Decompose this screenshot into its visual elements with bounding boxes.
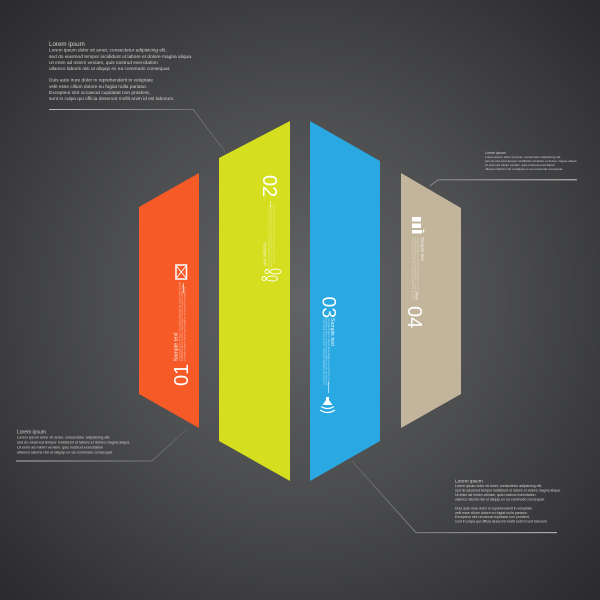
heading: sample text 03: Sample text (329, 318, 335, 346)
text block: bottom right description: Duis aute irure dolor in reprehenderit in voluptate (455, 506, 532, 510)
divider 04 (416, 292, 418, 300)
body lines 03: exercitation ullamco laboris nisi ut aliquip ex ea commodo conseq (327, 318, 330, 385)
text block: top left description: Lorem ipsum dolor sit amet, consectetur adipisicing elit, (49, 48, 167, 54)
leader line: top left (49, 109, 226, 153)
text block: top right description: Lorem ipsum (485, 151, 506, 155)
text block: top left description: ullamco laboris nisi ut aliquip ex ea commodo consequat. (49, 66, 170, 72)
text block: top left description: Duis aute irure dolor in reprehenderit in voluptate (49, 78, 153, 84)
divider 01 (182, 283, 185, 293)
leader line: bottom left (16, 429, 187, 461)
body lines 03 (322, 318, 330, 386)
panel: 02 lime (219, 121, 290, 481)
text block: bottom right description: velit esse cillum dolore eu fugiat nulla pariatur. (455, 511, 528, 515)
text block: top left description: Lorem ipsum (49, 41, 85, 48)
body lines 03: incididunt ut labore et dolore magna aliqua. Ut enim ad minim veni (324, 318, 328, 386)
text block: bottom left description: Lorem ipsum (17, 430, 46, 436)
text block: bottom right description: ullamco laboris nisi ut aliquip ex ea commodo consequat. (455, 497, 545, 501)
number 04: 04 (403, 306, 425, 328)
text block: top left description: velit esse cillum dolore eu fugiat nulla pariatur. (49, 84, 147, 90)
body lines 01 (178, 281, 186, 361)
divider 03 (327, 382, 330, 393)
icon: envelope (176, 265, 186, 279)
heading: sample text 02: Sample text (262, 242, 268, 267)
text block: bottom right description: sed do eiusmod tempor incididunt ut labore et dolore magna aliqua. (455, 488, 561, 492)
body lines 01: exercitation ullamco laboris nisi ut aliquip ex ea commodo consequat sed. (184, 286, 186, 361)
text block: top left description: sunt in culpa qui officia deserunt mollit anim id est laborum. (49, 96, 174, 102)
body lines 01: incididunt ut labore et dolore magna aliqua. Ut enim ad minim veniam, quis (181, 284, 184, 361)
icon: people (262, 269, 281, 281)
divider 02 (269, 201, 272, 207)
text block: bottom right description: Lorem ipsum dolor sit amet, consectetur adipisicing elit, (455, 484, 542, 488)
text block: bottom left description: Ut enim ad minim veniam, quis nostrud exercitation (17, 446, 103, 450)
body lines 04: incididunt ut labore et dolore magna aliqua. Ut enim ad minim (414, 237, 416, 300)
text block: top right description (485, 151, 577, 171)
text block: top left description: Excepteur sint occaecat cupidatat non proident, (49, 90, 150, 96)
panel: 01 orange (139, 173, 199, 428)
number 01: 01 (171, 364, 193, 386)
text block: top right description: Ut enim ad minim veniam, quis nostrud exercitation (485, 163, 555, 167)
text block: top right description: sed do eiusmod tempor incididunt ut labore et dolore magna aliqua. (485, 159, 577, 163)
body lines 02: incididunt ut labore et dolore magna aliqua. Ut enim ad minim (270, 205, 272, 268)
text block: bottom left description: sed do eiusmod tempor incididunt ut labore et dolore magna aliqua. (17, 440, 130, 444)
text block: top left description: sed do eiusmod tempor incididunt ut labore et dolore magna aliqua. (49, 54, 192, 60)
text block: bottom right description (455, 478, 561, 524)
number 03: 03 (318, 296, 340, 318)
heading: sample text 01: Sample text (174, 332, 180, 362)
text block: bottom left description: Lorem ipsum dolor sit amet, consectetur adipisicing elit, (17, 436, 110, 440)
text block: bottom left description: ullamco laboris nisi ut aliquip ex ea commodo consequat. (17, 450, 113, 454)
text block: bottom left description (17, 430, 130, 454)
body lines 02 (267, 205, 275, 270)
leader line: top right (430, 180, 577, 186)
body lines 02: exercitation ullamco laboris nisi ut aliquip ex ea commodo. (272, 205, 275, 265)
body lines 02: Lorem ipsum dolor sit amet, consectetur adipisicing elit, sed do (267, 205, 270, 270)
body lines 04 (411, 237, 419, 302)
text block: bottom right description: Ut enim ad minim veniam, quis nostrud exercitation (455, 493, 535, 497)
body lines 04: Lorem ipsum dolor sit amet, consectetur adipisicing elit, sed do (411, 237, 414, 302)
text block: bottom right description: Lorem ipsum (455, 478, 483, 484)
panel: 04 tan (401, 173, 461, 428)
icon: bars (412, 217, 424, 234)
text block: bottom right description: Excepteur sint occaecat cupidatat non proident, (455, 515, 530, 519)
leader line: bottom right (352, 461, 557, 533)
number 02: 02 (258, 175, 280, 197)
panel: 03 blue (310, 121, 380, 481)
heading: sample text 04: Sample text (420, 237, 425, 262)
text block: top left description (49, 41, 192, 102)
text block: top right description: Lorem ipsum dolor sit amet, consectetur adipisicing elit, (485, 155, 561, 159)
body lines 01: Lorem ipsum dolor sit amet, consectetur adipisicing elit, sed do eiusmod temp (178, 281, 182, 361)
text block: top right description: ullamco laboris nisi ut aliquip ex ea commodo consequat. (485, 167, 563, 171)
icon: speaker (320, 397, 335, 412)
text block: top left description: Ut enim ad minim veniam, quis nostrud exercitation (49, 60, 158, 66)
body lines 03: Lorem ipsum dolor sit amet, consectetur adipisicing elit, sed do ei (322, 318, 325, 385)
body lines 04: exercitation ullamco laboris nisi ut aliquip ex ea commodo. (416, 237, 419, 297)
text block: bottom right description: sunt in culpa qui officia deserunt mollit anim id est laborum. (455, 520, 548, 524)
